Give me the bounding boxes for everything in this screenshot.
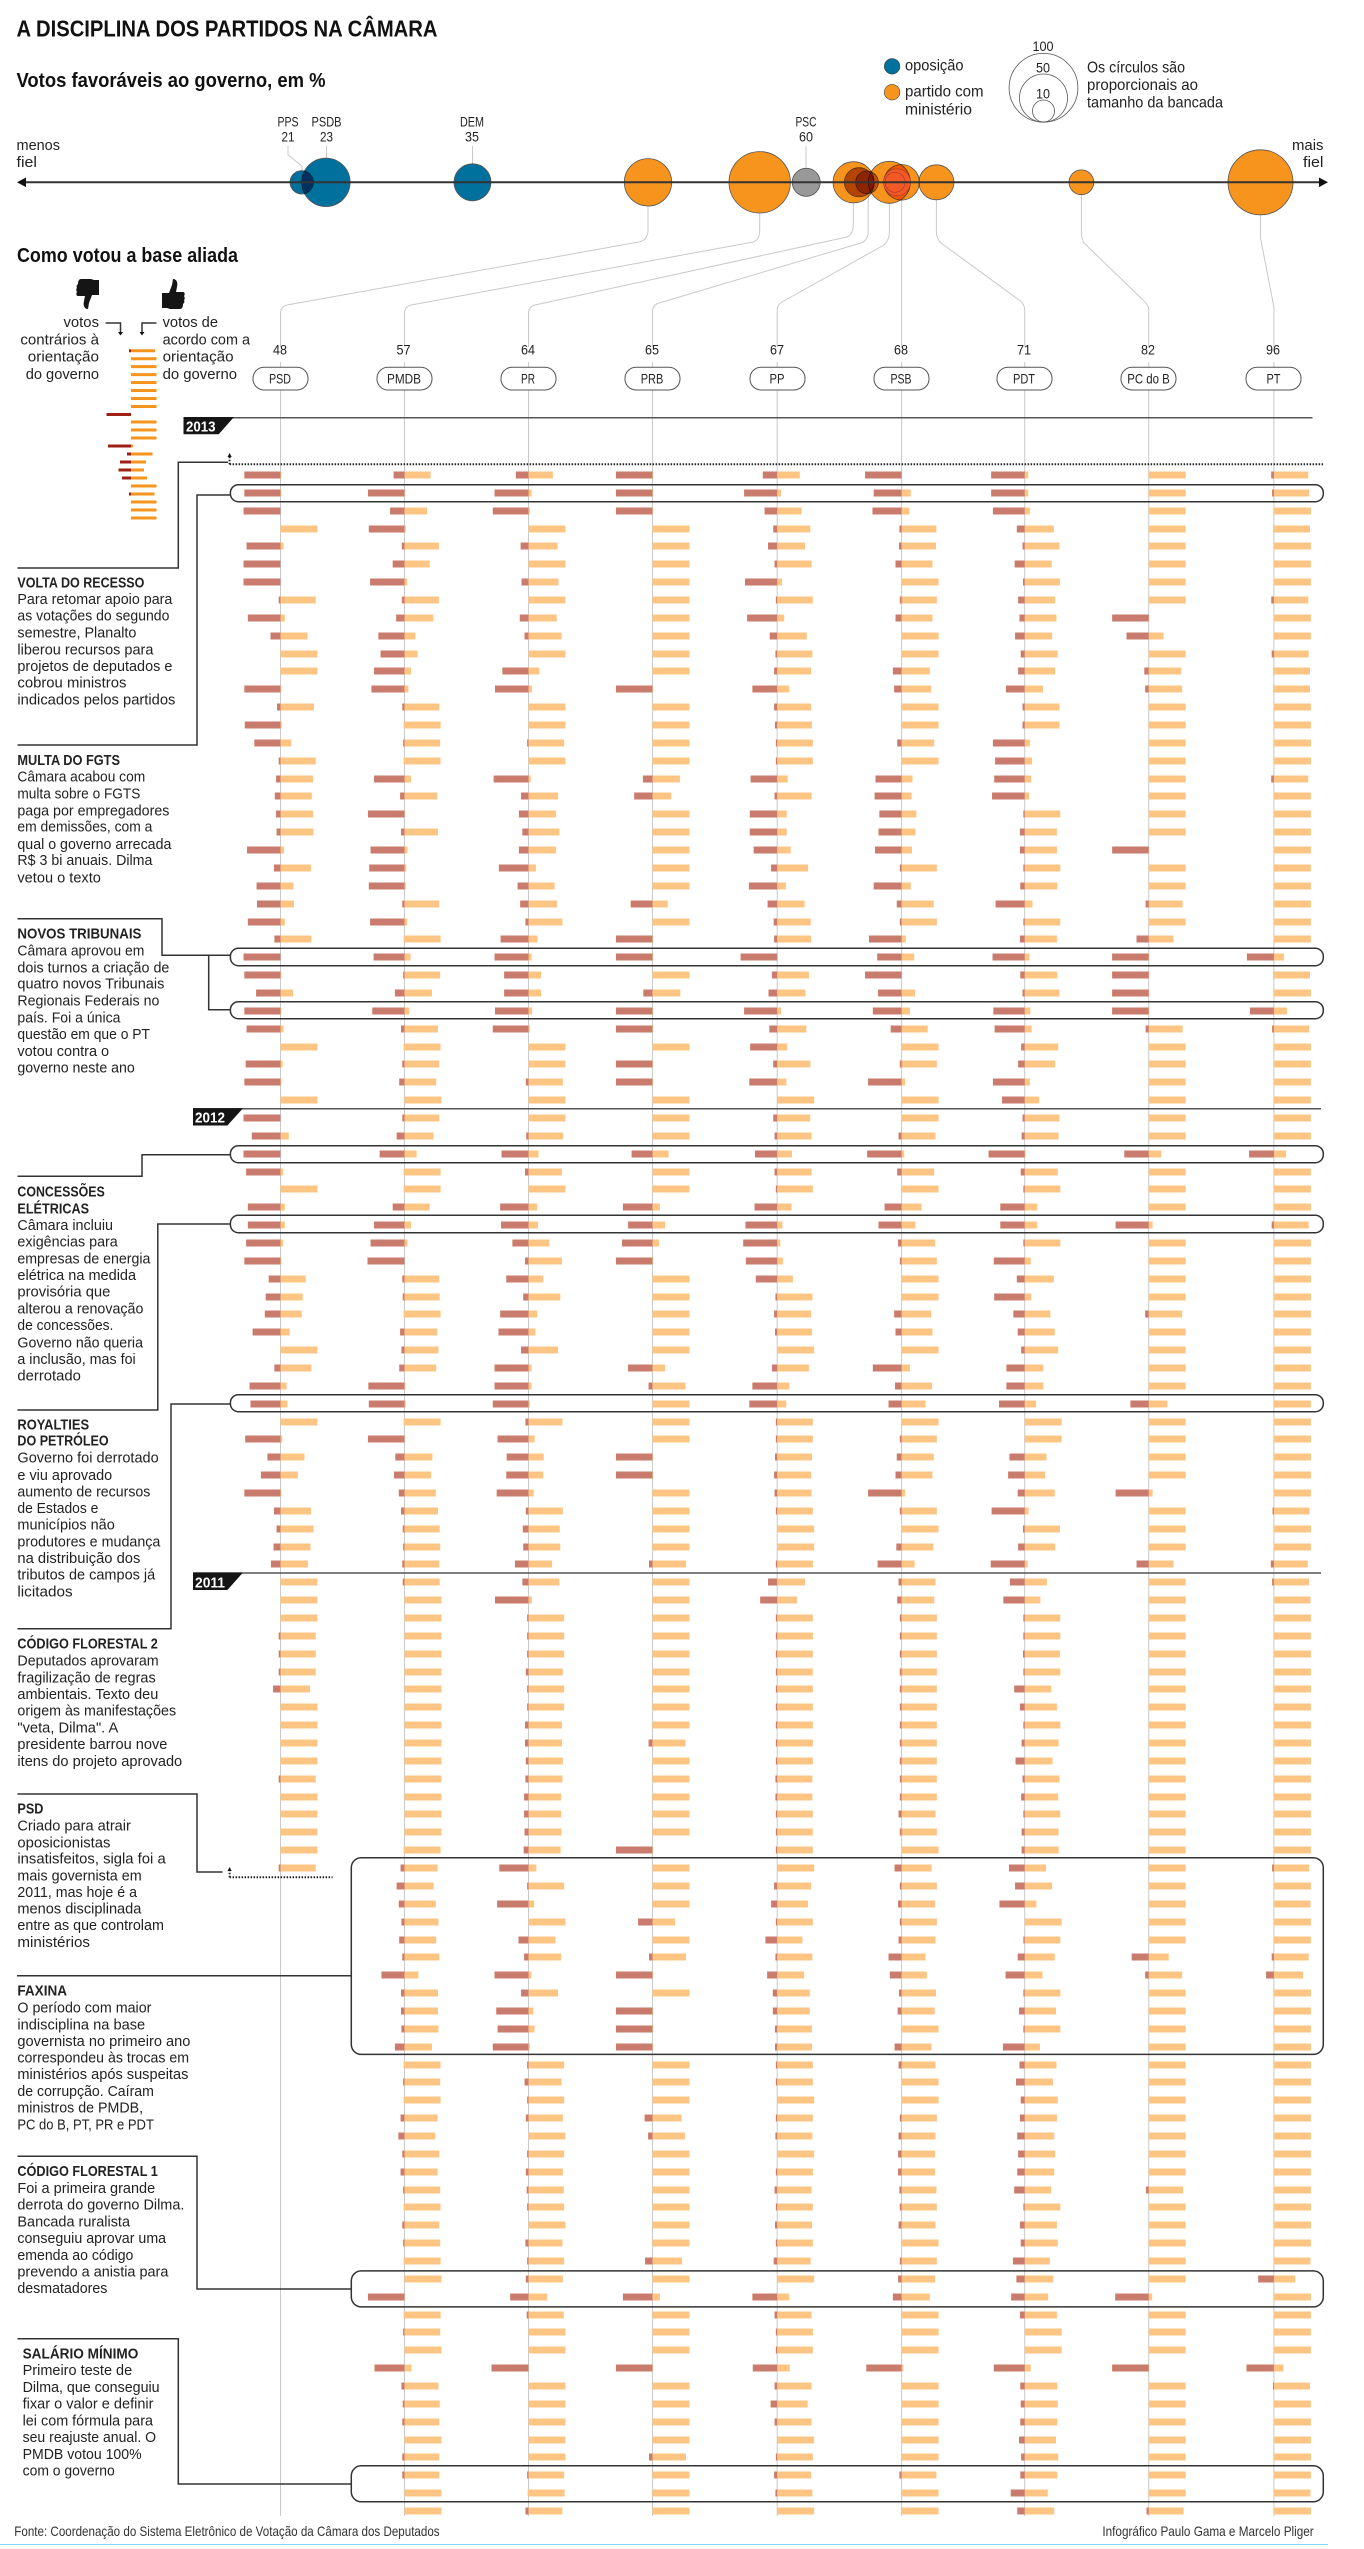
legend text: votos de acordo: orientação <box>163 349 234 366</box>
text block: faxina <box>17 1983 190 2133</box>
year flag 2013: 2013 <box>186 418 216 435</box>
legend: party colours <box>884 58 984 118</box>
text block: faxina: ministros de PMDB, <box>17 2100 143 2117</box>
text block: código florestal 2: "veta, Dilma". A <box>17 1719 118 1736</box>
text block: faxina: indisciplina na base <box>17 2017 145 2034</box>
text block: faxina: de corrupção. Caíram <box>17 2083 154 2100</box>
text block: faxina: PC do B, PT, PR e PDT <box>17 2116 154 2133</box>
text block: volta do recesso: as votações do segundo <box>17 608 169 625</box>
text block: novos tribunais: quatro novos Tribunais <box>17 976 164 993</box>
party columns: numbers and name pills: 67 <box>770 342 784 358</box>
title: A DISCIPLINA DOS PARTIDOS NA CÂMARA <box>16 14 438 42</box>
text block: multa do FGTS: vetou o texto <box>17 869 101 886</box>
text block: código florestal 1: conseguiu aprovar uma <box>17 2230 167 2247</box>
text block: salário mínimo <box>23 2346 160 2480</box>
callout leader lines <box>17 462 351 2484</box>
text block: código florestal 1: prevendo a anistia para <box>17 2264 169 2281</box>
text block: código florestal 2: fragilização de regras <box>17 1669 156 1686</box>
text block: multa do FGTS: qual o governo arrecada <box>17 836 172 853</box>
text block: multa do FGTS: multa sobre o FGTS <box>17 785 140 802</box>
axis end label: menos fiel: fiel <box>16 154 37 171</box>
text block: volta do recesso <box>17 574 175 708</box>
party columns: numbers and name pills: 65 <box>645 342 659 358</box>
text block: faxina: FAXINA <box>17 1983 67 2000</box>
text block: código florestal 1: Bancada ruralista <box>17 2214 131 2231</box>
legend text: votos contrários: votos <box>64 314 99 331</box>
text block: concessões elétricas <box>17 1183 151 1384</box>
text block: salário mínimo: seu reajuste anual. O <box>23 2429 156 2446</box>
text block: salário mínimo: SALÁRIO MÍNIMO <box>23 2346 139 2363</box>
text block: concessões elétricas: ELÉTRICAS <box>17 1200 89 1217</box>
text block: concessões elétricas: CONCESSÕES <box>17 1183 105 1201</box>
opposition party labels: PSC <box>796 114 816 130</box>
text block: volta do recesso: indicados pelos partidos <box>17 691 175 708</box>
text block: concessões elétricas: Governo não queria <box>17 1334 144 1351</box>
axis end label: mais fiel: fiel <box>1303 154 1324 171</box>
opposition party labels: PSDB <box>312 114 342 130</box>
legend text: votos contrários: orientação <box>28 349 99 366</box>
text block: royalties do petróleo: de Estados e <box>17 1500 98 1517</box>
arrow: menos fiel to mais fiel axis <box>17 178 1328 187</box>
source note: Fonte: Coordenação do Sistema Eletrônico de Votação da Câmara dos Deputados <box>14 2523 440 2539</box>
text block: novos tribunais: Regionais Federais no <box>17 993 159 1010</box>
legend text: votos de acordo: do governo <box>163 366 237 383</box>
text block: concessões elétricas: alterou a renovação <box>17 1301 143 1318</box>
year flag 2012 <box>193 1108 243 1126</box>
party columns: numbers and name pills: PC do B <box>1127 370 1170 386</box>
text block: multa do FGTS: R$ 3 bi anuais. Dilma <box>17 852 153 869</box>
text block: concessões elétricas: de concessões. <box>17 1317 113 1334</box>
text block: concessões elétricas: Câmara incluiu <box>17 1217 113 1234</box>
text block: novos tribunais: país. Foi a única <box>17 1009 121 1026</box>
party columns: numbers and name pills: PP <box>770 370 784 386</box>
text block: concessões elétricas: empresas de energia <box>17 1250 151 1267</box>
icon: thumbs up <box>162 279 185 309</box>
text block: multa do FGTS: Câmara acabou com <box>17 769 145 786</box>
icon: thumbs down <box>76 279 99 309</box>
party columns: numbers and name pills: PSB <box>890 370 912 386</box>
text block: novos tribunais: Câmara aprovou em <box>17 942 144 959</box>
opposition party labels: 21 <box>282 129 295 145</box>
legend: circle size scale: 100 <box>1032 38 1054 54</box>
legend: circle size scale: tamanho da bancada <box>1087 94 1223 111</box>
text block: royalties do petróleo: ROYALTIES <box>17 1416 89 1433</box>
text block: PSD: ministérios <box>17 1934 90 1951</box>
text block: código florestal 2: itens do projeto aprovado <box>17 1753 182 1770</box>
text block: faxina: correspondeu às trocas em <box>17 2050 189 2067</box>
axis end label: menos fiel: menos <box>16 137 60 154</box>
vote bars: PT <box>1246 475 1311 2511</box>
party columns: numbers and name pills: 48 <box>273 342 287 358</box>
legend: circle size scale <box>1009 38 1223 122</box>
text block: código florestal 1: CÓDIGO FLORESTAL 1 <box>17 2162 158 2180</box>
legend: party colours: oposição <box>905 58 964 75</box>
party columns: numbers and name pills: PRB <box>641 370 663 386</box>
text block: PSD: mais governista em <box>17 1868 142 1885</box>
text block: novos tribunais: dois turnos a criação de <box>17 959 169 976</box>
text block: multa do FGTS <box>17 752 172 886</box>
heading: votos favoráveis: Votos favoráveis ao governo, em % <box>16 70 326 92</box>
text block: PSD: 2011, mas hoje é a <box>17 1884 138 1901</box>
text block: código florestal 2: CÓDIGO FLORESTAL 2 <box>17 1635 158 1653</box>
year flag 2011: 2011 <box>195 1574 225 1591</box>
axis end label: mais fiel: mais <box>1292 137 1324 154</box>
vote bars: PC do B <box>1112 475 1186 2511</box>
opposition party labels <box>278 114 816 145</box>
text block: concessões elétricas: exigências para <box>17 1234 118 1251</box>
legend: party colours: partido com <box>905 84 984 101</box>
legend text: votos contrários: contrários à <box>20 331 100 348</box>
text block: novos tribunais <box>17 926 169 1077</box>
legend: party colours: ministério <box>905 101 972 118</box>
vote bars: PP <box>741 475 814 2511</box>
text block: royalties do petróleo: aumento de recursos <box>17 1483 150 1500</box>
text block: volta do recesso: VOLTA DO RECESSO <box>17 574 145 591</box>
party columns: numbers and name pills: PSD <box>269 370 291 386</box>
text block: código florestal 1 <box>17 2162 184 2297</box>
text block: concessões elétricas: a inclusão, mas foi <box>17 1351 136 1368</box>
year flag 2012: 2012 <box>195 1109 225 1126</box>
opposition party labels: DEM <box>460 114 484 130</box>
vote bars: PR <box>492 475 565 2511</box>
text block: volta do recesso: cobrou ministros <box>17 675 126 692</box>
text block: multa do FGTS: em demissões, com a <box>17 819 153 836</box>
party columns: numbers and name pills: 71 <box>1017 342 1031 358</box>
vote bars: PMDB <box>368 475 441 2511</box>
legend: circle size scale: 10 <box>1036 85 1050 101</box>
text block: volta do recesso: Para retomar apoio para <box>17 591 173 608</box>
opposition party labels: 23 <box>320 129 333 145</box>
vote bars: PSB <box>865 475 939 2511</box>
opposition party labels: 35 <box>465 129 479 145</box>
party columns: numbers and name pills <box>253 342 1301 390</box>
legend text: votos contrários: do governo <box>26 366 99 383</box>
vote bars: PDT <box>989 475 1062 2511</box>
text block: novos tribunais: votou contra o <box>17 1043 109 1060</box>
heading: como votou a base aliada: Como votou a base aliada <box>17 245 239 267</box>
text block: concessões elétricas: derrotado <box>17 1367 81 1384</box>
party columns: numbers and name pills: PR <box>521 370 535 386</box>
text block: código florestal 2: origem às manifestações <box>17 1703 176 1720</box>
vote bars: PSD <box>244 475 317 1868</box>
text block: concessões elétricas: elétrica na medida <box>17 1267 137 1284</box>
text block: salário mínimo: Primeiro teste de <box>23 2362 132 2379</box>
text block: salário mínimo: Dilma, que conseguiu <box>23 2379 160 2396</box>
dotted period markers <box>228 453 1323 1877</box>
bubble chart: votes in favour of the government <box>290 150 1293 215</box>
text block: royalties do petróleo: produtores e mudança <box>17 1533 161 1550</box>
text block: royalties do petróleo: municípios não <box>17 1517 115 1534</box>
text block: volta do recesso: semestre, Planalto <box>17 625 136 642</box>
text block: PSD: insatisfeitos, sigla foi a <box>17 1851 166 1868</box>
legend: circle size scale: proporcionais ao <box>1087 77 1198 94</box>
legend text: votos de acordo: acordo com a <box>163 331 251 348</box>
text block: salário mínimo: fixar o valor e definir <box>23 2396 154 2413</box>
text block: código florestal 2 <box>17 1635 182 1770</box>
text block: multa do FGTS: MULTA DO FGTS <box>17 752 120 769</box>
text block: código florestal 1: Foi a primeira grande <box>17 2180 155 2197</box>
text block: novos tribunais: governo neste ano <box>17 1060 135 1077</box>
text block: PSD: Criado para atrair <box>17 1818 131 1835</box>
axis end label: menos fiel <box>16 137 60 171</box>
text block: código florestal 2: presidente barrou nove <box>17 1736 167 1753</box>
text block: multa do FGTS: paga por empregadores <box>17 803 169 820</box>
text block: royalties do petróleo: e viu aprovado <box>17 1467 112 1484</box>
text block: código florestal 2: ambientais. Texto deu <box>17 1686 158 1703</box>
text block: royalties do petróleo: na distribuição dos <box>17 1550 140 1567</box>
opposition party labels: 60 <box>799 129 813 145</box>
text block: novos tribunais: NOVOS TRIBUNAIS <box>17 926 141 943</box>
year flag 2011 <box>193 1572 243 1591</box>
party columns: numbers and name pills: PDT <box>1013 370 1035 386</box>
party columns: numbers and name pills: 96 <box>1266 342 1280 358</box>
text block: faxina: ministérios após suspeitas <box>17 2066 188 2083</box>
text block: salário mínimo: lei com fórmula para <box>23 2412 154 2429</box>
party columns: numbers and name pills: PMDB <box>387 370 421 386</box>
text block: PSD <box>17 1800 166 1951</box>
text block: royalties do petróleo <box>17 1416 161 1601</box>
text block: PSD: entre as que controlam <box>17 1917 164 1934</box>
text block: faxina: governista no primeiro ano <box>17 2033 190 2050</box>
text block: concessões elétricas: provisória que <box>17 1284 110 1301</box>
party columns: numbers and name pills: 82 <box>1141 342 1155 358</box>
legend text: votos de acordo <box>163 314 251 383</box>
legend arrows <box>106 323 156 336</box>
opposition party labels: PPS <box>278 114 298 130</box>
legend text: votos contrários <box>20 314 100 383</box>
text block: PSD: menos disciplinada <box>17 1901 142 1918</box>
text block: salário mínimo: PMDB votou 100% <box>23 2446 142 2463</box>
text block: código florestal 2: Deputados aprovaram <box>17 1652 159 1669</box>
legend: circle size scale: 50 <box>1036 60 1050 76</box>
legend: mini vote bars <box>106 351 156 518</box>
highlight boxes around key votes <box>230 485 1323 2502</box>
party columns: numbers and name pills: PT <box>1266 370 1281 386</box>
connector lines from bubbles to party columns <box>280 146 1274 2516</box>
text block: royalties do petróleo: licitados <box>17 1584 73 1601</box>
vote bars: PRB <box>616 475 689 2511</box>
text block: novos tribunais: questão em que o PT <box>17 1026 150 1043</box>
text block: volta do recesso: projetos de deputados e <box>17 658 172 675</box>
credit: Infográfico Paulo Gama e Marcelo Pliger <box>1102 2523 1314 2539</box>
legend: circle size scale: Os círculos são <box>1087 59 1185 76</box>
text block: royalties do petróleo: tributos de campos já <box>17 1567 156 1584</box>
text block: royalties do petróleo: DO PETRÓLEO <box>17 1432 109 1450</box>
text block: código florestal 1: derrota do governo Dilma. <box>17 2197 184 2214</box>
text block: PSD: oposicionistas <box>17 1834 110 1851</box>
text block: código florestal 1: desmatadores <box>17 2280 107 2297</box>
text block: salário mínimo: com o governo <box>23 2463 115 2480</box>
year flag 2013 <box>184 417 234 435</box>
party columns: numbers and name pills: 64 <box>521 342 535 358</box>
year separators <box>184 417 1321 1591</box>
text block: royalties do petróleo: Governo foi derrotado <box>17 1450 159 1467</box>
text block: código florestal 1: emenda ao código <box>17 2247 133 2264</box>
party columns: numbers and name pills: 57 <box>396 342 411 358</box>
text block: volta do recesso: liberou recursos para <box>17 641 154 658</box>
text block: faxina: O período com maior <box>17 2000 151 2017</box>
text block: PSD: PSD <box>17 1800 44 1817</box>
legend text: votos de acordo: votos de <box>163 314 218 331</box>
axis end label: mais fiel <box>1292 137 1324 171</box>
party columns: numbers and name pills: 68 <box>894 342 908 358</box>
